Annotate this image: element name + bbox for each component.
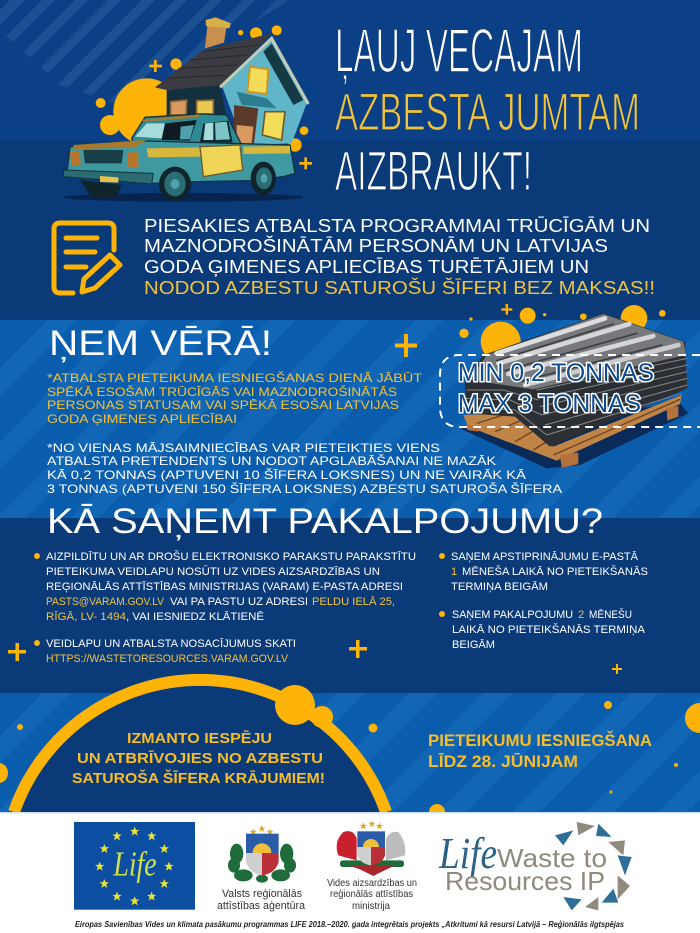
steps: left column: RĪGĀ, LV- 1494 [46,611,126,623]
pallet [460,395,688,468]
heading: kā saņemt pakalpojumu: KĀ SAŅEMT PAKALPOJUMU? [47,502,603,541]
logo: state regional development agency [217,825,306,912]
steps: right column: SAŅEM PAKALPOJUMU [452,609,573,621]
note: quantity requirement: *NO VIENAS MĀJSAIMNIECĪBAS VAR PIETEIKTIES VIENS [47,441,440,455]
call to action text: IZMANTO IESPĒJU [127,730,272,747]
logo: LIFE Waste to Resources IP [438,822,632,910]
steps: left column [34,550,416,665]
illustration: house on pickup truck [63,17,312,202]
intro text: NODOD AZBESTU SATUROŠU ŠĪFERI BEZ MAKSAS!! [144,277,655,298]
callout: dashed box with tonnage limits [440,355,700,427]
intro text: MAZNODROŠINĀTĀM PERSONĀM UN LATVIJAS [144,235,608,256]
logo: LIFE Waste to Resources IP: Life [438,829,497,878]
note: status requirement: SPĒKĀ ESOŠAM TRŪCĪGĀS VAI MAZNODROŠINĀTĀS [47,384,397,399]
steps: left column: PIETEIKUMA VEIDLAPU NOSŪTI UZ VIDES AIZSARDZĪBAS UN [46,566,380,578]
ministry name: reģionālās attīstības [330,887,413,900]
call to action text [72,730,325,787]
steps: right column: 2 [578,609,584,621]
note: quantity requirement [47,441,562,496]
steps: right column: 1 [451,566,457,578]
deadline text: PIETEIKUMU IESNIEGŠANA [428,731,652,750]
steps: left column: HTTPS://WASTETORESOURCES.VARAM.GOV.LV [46,653,289,665]
icons: small plus marks [8,640,622,674]
note: quantity requirement: KĀ 0,2 TONNAS (APTUVENI 10 ŠĪFERA LOKSNES) UN NE VAIRĀK KĀ [47,467,526,482]
steps: left column: PASTS@VARAM.GOV.LV [46,596,165,608]
steps: left column: PELDU IELĀ 25, [312,596,395,608]
agency name: Valsts reģionālās [222,887,302,900]
steps: right column: MĒNEŠA LAIKĀ NO PIETEIKŠANĀS [462,565,648,578]
agency name: attīstības aģentūra [217,899,306,912]
slate sheets [465,313,687,447]
intro text: PIESAKIES ATBALSTA PROGRAMMAI TRŪCĪGĀM UN [144,216,650,236]
call to action text: UN ATBRĪVOJIES NO AZBESTU [77,750,323,767]
yellow blobs behind house [96,25,312,169]
maximum tonnage: MAX 3 TONNAS [458,390,641,418]
house [155,17,308,145]
title [335,17,640,202]
steps: right column: LAIKĀ NO PIETEIKŠANĀS TERMIŅA [452,623,646,636]
ministry name [327,877,417,912]
heading: ņem vērā: ŅEM VĒRĀ! [49,324,272,363]
ring of arrows [555,822,632,910]
note: status requirement [47,370,423,426]
logo: LIFE Waste to Resources IP: Waste to [497,843,607,873]
title: AZBESTA JUMTAM [335,83,640,142]
icon: plus [395,334,417,357]
logo: EU LIFE flag: Life [113,844,157,883]
steps: left column: , VAI IESNIEDZ KLĀTIENĒ [126,611,264,623]
note: status requirement: GODA ĢIMENES APLIECĪBAI [47,412,237,426]
intro text [144,216,655,298]
yellow dots behind the stack [459,304,666,362]
minimum tonnage: MIN 0,2 TONNAS [458,359,654,387]
banner: yellow ring with call to action [14,680,386,812]
steps: left column: AIZPILDĪTU UN AR DROŠU ELEKTRONISKO PARAKSTU PARAKSTĪTU [46,550,416,563]
icon: document with pencil [54,223,120,293]
note: status requirement: PERSONAS STATUSAM VAI SPĒKĀ ESOŠAI LATVIJAS [47,397,399,412]
steps: left column: VEIDLAPU UN ATBALSTA NOSACĪJUMUS SKATI [46,638,296,650]
ministry name: ministrija [352,900,390,912]
steps: right column: BEIGĀM [452,639,495,651]
intro text: GODA ĢIMENES APLIECĪBAS TURĒTĀJIEM UN [144,257,589,277]
footer credit line: Eiropas Savienības Vides un klimata pasākumu programmas LIFE 2018.–2020. gada integrētais projekts „Atkritumi kā resursi Latvijā – Reģionālās ilgtspējas [75,920,625,929]
illustration: stack of slate on a pallet [459,304,688,468]
note: quantity requirement: ATBALSTA PRETENDENTS UN NODOT APGLABĀŠANAI NE MAZĀK [47,453,496,468]
logo: EU LIFE flag [74,822,195,910]
call to action text: SATUROŠA ŠĪFERA KRĀJUMIEM! [72,769,325,787]
steps: left column: VAI PA PASTU UZ ADRESI [170,596,308,608]
decorative dots in footer banner [0,701,700,812]
logo: LIFE Waste to Resources IP: Resources IP [445,866,605,896]
logo: ministry of environmental protection and regional development [327,820,417,912]
title: ĻAUJ VECAJAM [335,17,583,86]
title: AIZBRAUKT! [335,141,532,202]
note: status requirement: *ATBALSTA PIETEIKUMA IESNIEGŠANAS DIENĀ JĀBŪT [47,370,423,385]
deadline text [428,731,652,771]
agency name [217,887,306,912]
truck [63,114,303,202]
steps: left column: REĢIONĀLĀS ATTĪSTĪBAS MINISTRIJAS (VARAM) E-PASTA ADRESI [46,581,403,593]
note: quantity requirement: 3 TONNAS (APTUVENI 150 ŠĪFERA LOKSNES) AZBESTU SATUROŠA ŠĪFERA [47,481,562,496]
steps: right column [439,551,648,651]
deadline text: LĪDZ 28. JŪNIJAM [428,752,578,771]
steps: right column: SAŅEM APSTIPRINĀJUMU E-PASTĀ [451,551,639,563]
ministry name: Vides aizsardzības un [327,877,417,889]
steps: right column: TERMIŅA BEIGĀM [451,581,548,593]
steps: right column: MĒNEŠU [589,608,632,621]
